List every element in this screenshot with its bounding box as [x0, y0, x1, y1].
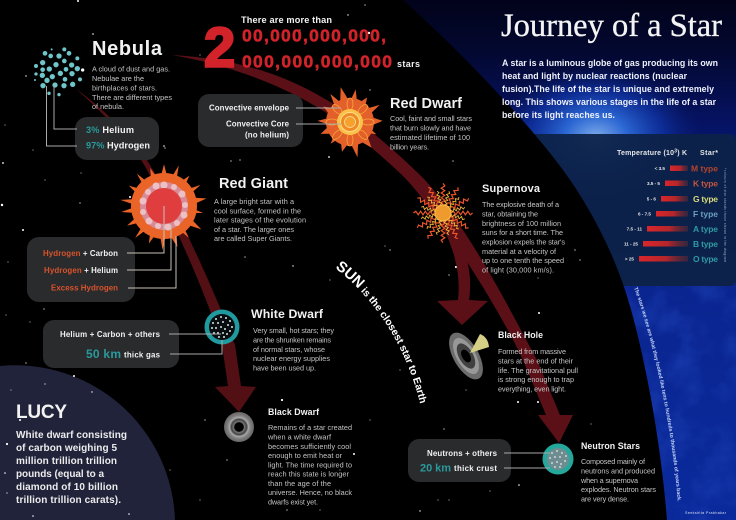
text: Red Giant description: cool surface, formed in the	[214, 206, 301, 216]
Lucy body	[16, 430, 127, 506]
text: Neutron Stars description: explodes. Neutron stars	[581, 485, 656, 494]
text: Black Dwarf description: enough to emit heat or	[268, 451, 343, 460]
text: Red Giant description: are called Super Giants.	[214, 234, 292, 243]
panel: red dwarf structure: Convective Core	[226, 120, 290, 128]
heading: Black Dwarf: Black Dwarf	[268, 407, 319, 417]
panel: red giant composition: Hydrogen + Carbon	[43, 249, 118, 258]
text: Nebula description: Nebulae are the	[92, 74, 144, 83]
Lucy body: pounds (equal to a	[16, 469, 104, 480]
text: Black Dwarf description: than the age of the	[268, 479, 331, 488]
star field	[1, 0, 592, 512]
text: White Dwarf description	[253, 326, 334, 372]
heading: Red Giant: Red Giant	[219, 176, 288, 192]
panel: white dwarf composition: thick gas	[124, 350, 161, 360]
panel: red dwarf structure	[198, 94, 303, 147]
panel: red giant composition: Hydrogen + Helium	[44, 266, 118, 275]
text: SUN curved caption: SUN is the closest star to Earth	[336, 262, 426, 404]
chart header: Temperature (10	[617, 150, 674, 157]
text: White Dwarf description: nuclear energy supplies	[253, 354, 330, 363]
panel: neutron star composition: 20 km	[420, 462, 451, 474]
chart bars	[639, 166, 688, 262]
icon: supernova	[413, 183, 473, 243]
chart ranges: 3.5 - 5	[647, 181, 660, 186]
arrow: main stellar path to neutron star	[172, 55, 573, 443]
panel: nebula composition	[46, 84, 159, 160]
text: Black Dwarf description: universe. Hence, no black	[268, 488, 352, 497]
chart ranges: 6 - 7.5	[638, 212, 651, 216]
heading: Red Dwarf: Red Dwarf	[390, 96, 462, 112]
panel: white dwarf composition: 50 km	[86, 347, 121, 361]
text: Supernova description: The explosive death of a	[482, 200, 560, 209]
Lucy body: million trillion trillion	[16, 456, 117, 467]
text: intro: before its light reaches us.	[502, 110, 615, 120]
chart types: G type	[693, 194, 718, 204]
text: Supernova description: material at a velocity of	[482, 247, 557, 256]
chart ranges: > 25	[625, 256, 634, 262]
chart types: A type	[693, 224, 718, 234]
Lucy text	[16, 402, 127, 506]
text: Black Hole description: life. The gravitational pull	[498, 366, 578, 375]
text: White Dwarf description: Very small, hot stars; they	[253, 326, 334, 335]
Lucy heading: LUCY	[16, 402, 67, 423]
text: Supernova description	[482, 200, 565, 274]
text: Red Giant description: of a star. The larger ones	[214, 225, 294, 234]
big number: 200 sextillion stars	[204, 15, 420, 78]
heading: Nebula: Nebula	[92, 38, 163, 60]
panel: white dwarf composition	[43, 320, 179, 368]
chart ranges: < 3.5	[655, 166, 665, 171]
panel: red giant composition	[27, 237, 135, 302]
text: Black Hole description	[498, 347, 578, 394]
text: Black Dwarf description: Remains of a star created	[268, 423, 352, 432]
text: Black Dwarf description: becomes sufficiently cool	[268, 442, 351, 451]
icon: white dwarf	[204, 310, 240, 344]
heading: Supernova: Supernova	[482, 183, 541, 195]
chart ranges	[624, 166, 665, 262]
text: Nebula description: birthplaces of stars.	[92, 84, 157, 92]
text: Red Giant description: later stages of the evolution	[214, 216, 306, 224]
chart header: Star*	[700, 150, 718, 157]
Lucy body: of carbon weighing 5	[16, 443, 117, 454]
title: Journey of a Star	[501, 8, 722, 44]
text: intro	[502, 58, 718, 120]
chart ranges: 11 - 25	[624, 242, 638, 246]
chart types: M type	[691, 164, 718, 174]
panel: nebula composition: 97% Hydrogen	[86, 140, 150, 150]
chart types: K type	[693, 178, 718, 188]
icon: black dwarf	[224, 412, 254, 442]
text: Red Dwarf description: Cool, faint and small stars	[390, 114, 472, 123]
text: Black Hole description: is strong enough to trap	[498, 375, 574, 384]
text: Black Dwarf description: light. The time required to	[268, 460, 352, 470]
chart ranges: 5 - 6	[647, 196, 656, 202]
text: Supernova description: brightness of 100 million	[482, 219, 561, 228]
icon: red giant star	[120, 164, 207, 250]
text: Supernova description: of light (30,000 km/s).	[482, 266, 554, 274]
connector: red dwarf lines	[296, 108, 341, 124]
panel: red dwarf structure: Convective envelope	[209, 104, 290, 112]
chart types	[691, 164, 718, 264]
big number: 200 sextillion stars: There are more than	[241, 15, 332, 25]
panel: red dwarf structure: (no helium)	[245, 130, 289, 140]
connector: neutron star lines	[504, 453, 550, 468]
text: Red Dwarf description: that burn slowly and have	[390, 124, 471, 132]
credit: Seekshita Prabhakar	[685, 511, 727, 515]
text: White Dwarf description: of normal stars, whose	[253, 345, 325, 354]
Lucy stars	[4, 362, 130, 517]
text: Neutron Stars description: neutrons and produced	[581, 466, 655, 476]
icon: neutron star	[542, 444, 574, 474]
chart types: F type	[693, 209, 718, 219]
arrow: branch to black hole	[418, 190, 488, 325]
panel: white dwarf composition: Helium + Carbon + others	[60, 330, 161, 339]
connector: red giant lines	[127, 206, 176, 288]
chart types: B type	[693, 239, 718, 249]
big number: 200 sextillion stars: 000,000,000,000	[242, 52, 392, 72]
chart header	[617, 148, 718, 157]
text: White Dwarf description: have been used up.	[253, 364, 316, 372]
panel: Lucy circle	[0, 365, 175, 520]
big number: 200 sextillion stars: 2	[204, 16, 235, 78]
heading: Neutron Stars: Neutron Stars	[581, 441, 640, 451]
chart types: O type	[693, 254, 718, 264]
text: Black Dwarf description: reach this state is longer	[268, 470, 350, 478]
connector: white dwarf lines	[169, 334, 222, 354]
big number: 200 sextillion stars: 00,000,000,000,	[242, 26, 386, 46]
Lucy body: White dwarf consisting	[16, 430, 127, 441]
text: Black Hole description: everything, even light.	[498, 384, 566, 394]
text: Black Dwarf description: when a white dwarf	[267, 432, 332, 442]
text: Supernova description: up to one tenth the speed	[482, 256, 564, 265]
panel: neutron star composition: Neutrons + others	[427, 449, 498, 458]
chart: temperature by star type	[617, 148, 727, 264]
text: Nebula description: of nebula.	[92, 102, 124, 111]
panel: neutron star composition	[408, 439, 511, 482]
icon: black hole	[442, 327, 490, 385]
text: Red Giant description	[214, 197, 306, 243]
text: Black Dwarf description	[267, 423, 352, 506]
text: Nebula description	[92, 64, 172, 111]
text: Neutron Stars description: Composed mainly of	[581, 457, 646, 466]
text: intro: long. This shows various stages in the life of a star	[502, 97, 717, 107]
text: Neutron Stars description	[580, 457, 656, 504]
chart ranges: 7.5 - 11	[627, 226, 642, 232]
icon: nebula dots	[34, 47, 84, 96]
text: Black Dwarf description: dwarfs exist yet.	[268, 498, 318, 506]
text: Neutron Stars description: when a supernova	[580, 476, 639, 485]
text: Red Dwarf description: estimated lifetime of 100	[390, 133, 470, 142]
chart header: 3	[674, 148, 677, 154]
big number: 200 sextillion stars: stars	[397, 59, 420, 69]
text: Red Giant description: A large bright star with a	[214, 197, 295, 206]
text: Supernova description: star, obtaining the	[482, 210, 538, 218]
panel: neutron star composition: thick crust	[454, 464, 497, 473]
text: Nebula description: There are different types	[92, 93, 172, 102]
text: Black Hole description: stars at the end of their	[498, 356, 574, 366]
panel: nebula composition: 3% Helium	[86, 125, 134, 135]
Lucy body: diamond of 10 billion	[16, 482, 118, 493]
text: White Dwarf description: are the shrunken remains	[253, 336, 331, 344]
text: Supernova description: suns for a short time. The	[482, 228, 563, 237]
arrow: nebula to black dwarf path	[75, 88, 256, 412]
caption: along blue edge: The stars we see are what they looked like tens to hundreds to thousands of years back.	[634, 286, 682, 502]
text: intro: heat and light by nuclear reactions (nuclear	[502, 71, 688, 81]
text: Black Hole description: Formed from massive	[498, 347, 566, 356]
heading: White Dwarf: White Dwarf	[251, 307, 324, 321]
text: intro: fusion).The life of the star is unique and extremely	[502, 84, 714, 94]
text: intro: A star is a luminous globe of gas producing its own	[502, 58, 718, 68]
text: Nebula description: A cloud of dust and gas.	[92, 64, 170, 74]
text: Neutron Stars description: are very dense.	[581, 494, 629, 504]
icon: red dwarf star	[317, 86, 383, 158]
chart header: ) K	[677, 150, 687, 157]
text: Supernova description: explosion expels the star's	[482, 238, 565, 246]
chart footnote: *colours of star stands those shown in the diagram	[723, 168, 727, 262]
text: Red Dwarf description: billion years.	[390, 142, 429, 152]
heading: Black Hole: Black Hole	[498, 330, 543, 340]
Lucy body: trillion trillion carats).	[16, 495, 121, 506]
panel: red giant composition: Excess Hydrogen	[51, 284, 118, 292]
text: Red Dwarf description	[390, 114, 472, 152]
